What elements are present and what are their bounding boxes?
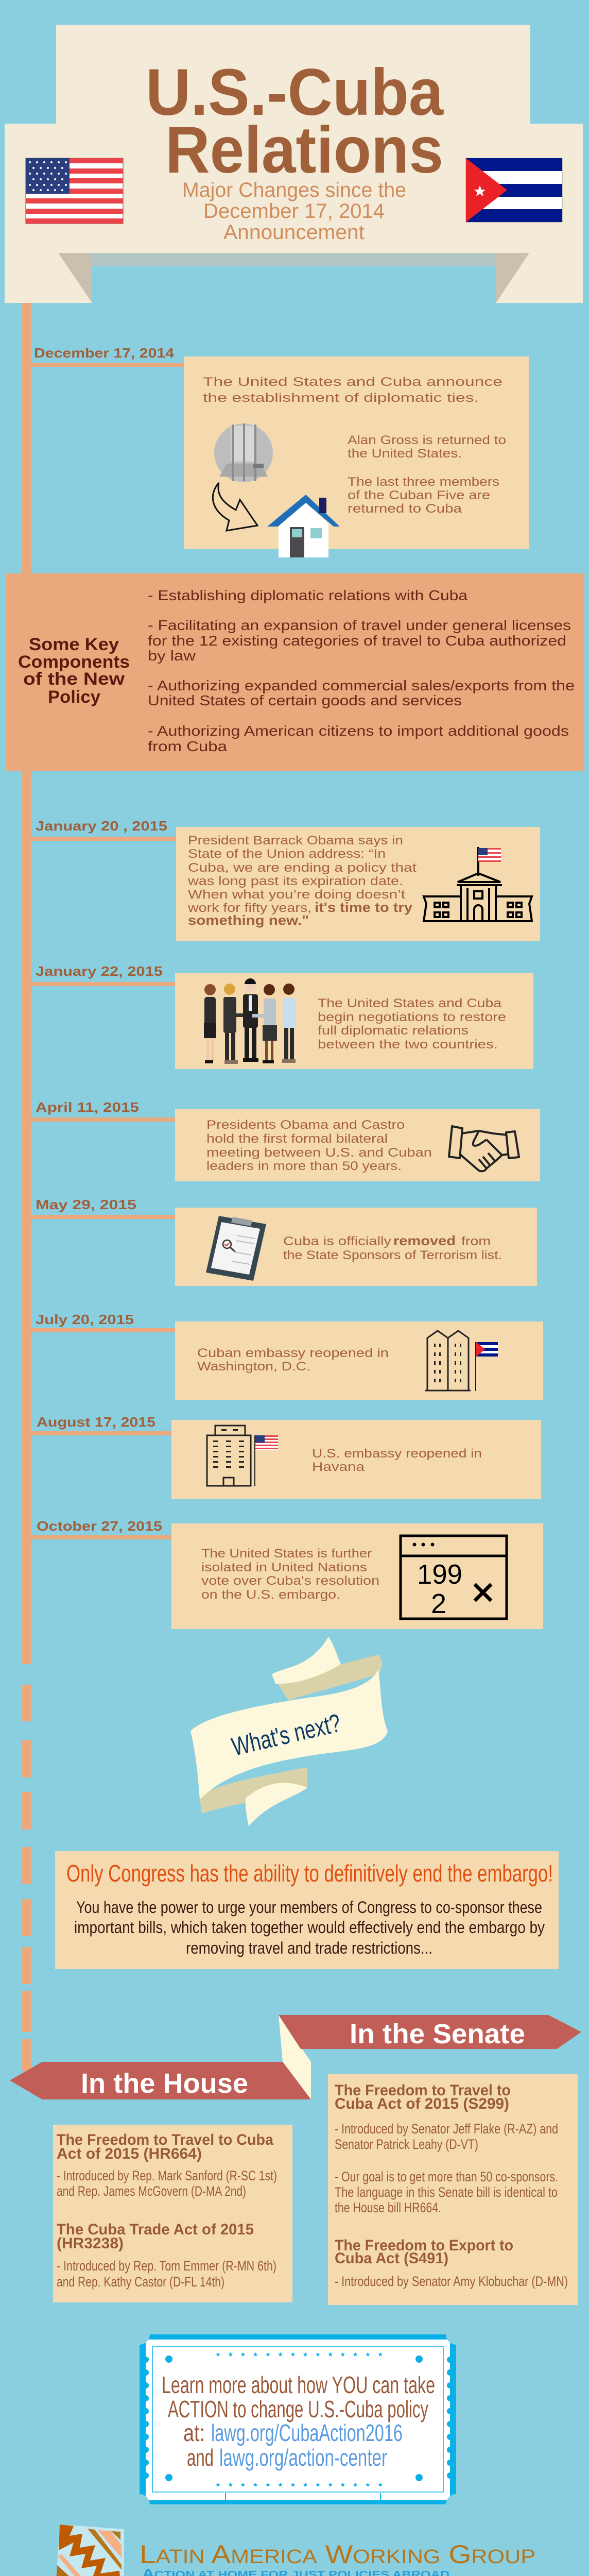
panel: senate bills: Cuba Act (S491)	[335, 2250, 448, 2267]
panel: May 29 event	[175, 1208, 537, 1286]
text: Cuban Five: of the Cuban Five are	[348, 488, 490, 502]
icon: jail cell	[214, 423, 273, 482]
panel: October 27 event	[171, 1523, 543, 1629]
list: policy points: by law	[148, 648, 196, 664]
panel: key components of new policy	[6, 573, 584, 771]
banner: In the Senate: In the Senate	[350, 2019, 525, 2049]
panel: April 11 event: leaders in more than 50 years.	[206, 1159, 402, 1173]
list: policy points: - Establishing diplomatic relations with Cuba	[148, 587, 467, 603]
date: January 20, 2015	[31, 818, 176, 841]
panel: house bills: Act of 2015 (HR664)	[57, 2145, 202, 2162]
banner: senate and house ribbons	[10, 2015, 581, 2099]
panel: July 20 event	[175, 1321, 543, 1400]
panel: April 11 event	[175, 1109, 540, 1181]
text: removed from list: the State Sponsors of Terrorism list.	[283, 1248, 502, 1262]
panel: August 17 event: U.S. embassy reopened in	[312, 1447, 482, 1461]
panel: Jan 22 event	[175, 973, 533, 1069]
icon: Cuban embassy building	[425, 1331, 498, 1391]
text: Cuban Five: The last three members	[348, 475, 499, 489]
ribbon: what's next: What's next?	[229, 1708, 343, 1761]
icon: US embassy building	[207, 1426, 278, 1486]
text: Cuban Five: returned to Cuba	[348, 502, 462, 516]
panel: house bills: - Introduced by Rep. Mark Sanford (R-SC 1st)	[57, 2168, 277, 2183]
subtitle: Major Changes since the	[182, 179, 406, 201]
title: Relations	[165, 113, 443, 187]
text: Obama quote: President Barrack Obama says in	[188, 834, 403, 848]
date: December 17, 2014: December 17, 2014	[34, 345, 175, 361]
date: October 27, 2015: October 27, 2015	[37, 1518, 162, 1534]
panel: July 20 event: Washington, D.C.	[197, 1360, 310, 1374]
date: July 20, 2015	[31, 1312, 175, 1332]
text: Obama quote: something new."	[188, 912, 309, 928]
panel: Dec 17 event	[184, 357, 529, 557]
text: Alan Gross	[348, 433, 506, 461]
date: October 27, 2015	[31, 1518, 171, 1539]
icon: arrow	[213, 483, 257, 531]
date: August 17, 2015	[31, 1414, 171, 1435]
date: April 11, 2015: April 11, 2015	[36, 1099, 139, 1115]
text: organization name: LATIN AMERICA WORKING GROUP	[140, 2540, 535, 2569]
text: learn more links: lawg.org/CubaAction2016	[211, 2419, 403, 2446]
text: learn more links: and	[187, 2444, 214, 2471]
icon: UN vote window 191-2: 2	[431, 1588, 446, 1619]
date: August 17, 2015: August 17, 2015	[37, 1414, 155, 1430]
date: July 20, 2015: July 20, 2015	[36, 1312, 134, 1327]
heading: some key components: Components	[18, 652, 130, 672]
panel: senate bills: the House bill HR664.	[335, 2200, 441, 2215]
panel: Dec 17 event: the establishment of diplomatic ties.	[203, 391, 479, 405]
date: January 20, 2015: January 20 , 2015	[36, 818, 167, 834]
date: January 22, 2015	[31, 963, 175, 986]
title	[146, 56, 444, 187]
logo: Latin America Working Group	[55, 2524, 535, 2576]
panel: only congress	[55, 1851, 559, 1969]
text: removed from list: removed	[393, 1233, 456, 1248]
icon: US flag	[26, 158, 123, 224]
panel: house bills	[53, 2125, 292, 2302]
text: Obama quote: work for fifty years,	[187, 901, 311, 915]
icon: house	[267, 495, 340, 557]
icon: clipboard	[206, 1216, 266, 1281]
panel: house bills: and Rep. James McGovern (D-MA 2nd)	[57, 2183, 246, 2199]
text: negotiations: between the two countries.	[318, 1038, 498, 1052]
text: learn more links: at:	[183, 2419, 205, 2446]
panel: house bills: and Rep. Kathy Castor (D-FL 14th)	[57, 2274, 224, 2290]
panel: senate bills: Cuba Act of 2015 (S299)	[335, 2095, 509, 2112]
date: May 29, 2015: May 29, 2015	[36, 1197, 136, 1212]
panel: Dec 17 event: The United States and Cuba announce	[203, 375, 503, 389]
text: Alan Gross: the United States.	[348, 447, 462, 461]
text: learn more links: ACTION to change U.S.-Cuba policy	[168, 2396, 428, 2422]
date: December 17, 2014	[31, 345, 184, 367]
subtitle	[182, 179, 406, 244]
ticket: learn more: ★★★★★★★★★★★★★★	[215, 2481, 383, 2488]
text: negotiations: The United States and Cuba	[318, 996, 502, 1010]
panel: house bills: (HR3238)	[57, 2235, 124, 2252]
banner: In the Senate	[279, 2015, 581, 2049]
heading: some key components: Some Key	[29, 635, 119, 654]
text: Cuban Five	[348, 475, 499, 516]
ribbon: what's next	[190, 1637, 388, 1826]
subtitle: Announcement	[223, 221, 365, 244]
panel: senate bills	[328, 2074, 578, 2305]
date: April 11, 2015	[31, 1099, 175, 1122]
panel: house bills: The Freedom to Travel to Cuba	[57, 2131, 273, 2148]
text: Obama quote: Cuba, we are ending a policy that	[188, 861, 417, 875]
text: Obama quote: it's time to try	[315, 900, 413, 915]
text: call to action: removing travel and trade restrictions...	[186, 1939, 432, 1957]
text: Alan Gross: Alan Gross is returned to	[348, 433, 506, 447]
heading: some key components: of the New	[23, 669, 125, 689]
icon: UN vote window 191-2	[401, 1536, 507, 1619]
panel: house bills: The Cuba Trade Act of 2015	[57, 2221, 254, 2238]
title: U.S.-Cuba	[146, 56, 444, 129]
dashed timeline	[22, 1685, 31, 2071]
heading: some key components	[18, 635, 130, 707]
icon: handshake	[449, 1126, 519, 1171]
date: January 22, 2015: January 22, 2015	[36, 963, 163, 979]
panel: house bills: - Introduced by Rep. Tom Emmer (R-MN 6th)	[57, 2258, 276, 2274]
text: removed from list	[283, 1233, 502, 1262]
panel: April 11 event: hold the first formal bilateral	[206, 1132, 388, 1146]
text: Obama quote: was long past its expiration date.	[187, 874, 403, 888]
icon: UN vote window 191-2: 199	[417, 1559, 462, 1590]
timeline line	[22, 303, 31, 1664]
list: policy points: United States of certain goods and services	[148, 692, 462, 708]
panel: senate bills: Senator Patrick Leahy (D-VT)	[335, 2137, 478, 2152]
icon: capitol building	[424, 847, 532, 921]
text: negotiations: begin negotiations to restore	[318, 1010, 506, 1024]
ticket: learn more: ★★★★★★★★★★★★★★	[215, 2351, 383, 2358]
list: policy points: - Authorizing American citizens to import additional goods	[148, 723, 569, 739]
text: removed from list: from	[461, 1234, 491, 1248]
panel: October 27 event: The United States is further	[201, 1547, 372, 1561]
banner: In the House	[10, 2062, 311, 2099]
icon: Cuba flag	[466, 158, 562, 222]
title banner	[5, 25, 583, 303]
panel: August 17 event: Havana	[312, 1460, 365, 1474]
list: policy points: - Authorizing expanded commercial sales/exports from the	[148, 677, 575, 693]
panel: senate bills: The Freedom to Export to	[335, 2237, 513, 2254]
list: policy points: from Cuba	[148, 738, 228, 754]
text: Obama quote: When what you’re doing doesn’t	[188, 888, 405, 902]
text: negotiations: full diplomatic relations	[318, 1024, 469, 1038]
list: policy points	[148, 587, 575, 754]
ticket: learn more	[129, 2324, 466, 2515]
date: May 29, 2015	[31, 1197, 175, 1219]
panel: April 11 event: meeting between U.S. and Cuban	[206, 1146, 432, 1160]
text: learn more links: lawg.org/action-center	[219, 2444, 387, 2471]
list: policy points: - Facilitating an expansion of travel under general licenses	[148, 617, 571, 633]
subtitle: December 17, 2014	[203, 200, 385, 223]
panel: October 27 event: on the U.S. embargo.	[201, 1588, 340, 1602]
text: call to action	[74, 1898, 545, 1957]
panel: August 17 event	[171, 1420, 541, 1499]
list: policy points: for the 12 existing categories of travel to Cuba authorized	[148, 633, 566, 649]
panel: senate bills: The Freedom to Travel to	[335, 2082, 511, 2099]
icon: negotiating people	[204, 978, 296, 1064]
panel: April 11 event: Presidents Obama and Castro	[206, 1118, 405, 1132]
icon: LAWG mark	[55, 2524, 124, 2576]
text: Obama quote	[187, 834, 417, 928]
text: negotiations	[318, 996, 506, 1052]
text: learn more links	[162, 2371, 435, 2471]
panel: October 27 event: vote over Cuba's resolution	[201, 1574, 379, 1588]
text: Obama quote: State of the Union address: “In	[188, 847, 386, 861]
banner: In the House: In the House	[81, 2068, 248, 2099]
text: removed from list: Cuba is officially	[283, 1234, 391, 1248]
heading: some key components: Policy	[48, 687, 100, 707]
panel: July 20 event: Cuban embassy reopened in	[197, 1346, 389, 1360]
panel: October 27 event: isolated in United Nations	[201, 1561, 367, 1574]
text: learn more links: Learn more about how YOU can take	[162, 2371, 435, 2398]
panel: Jan 20 event	[176, 827, 540, 941]
